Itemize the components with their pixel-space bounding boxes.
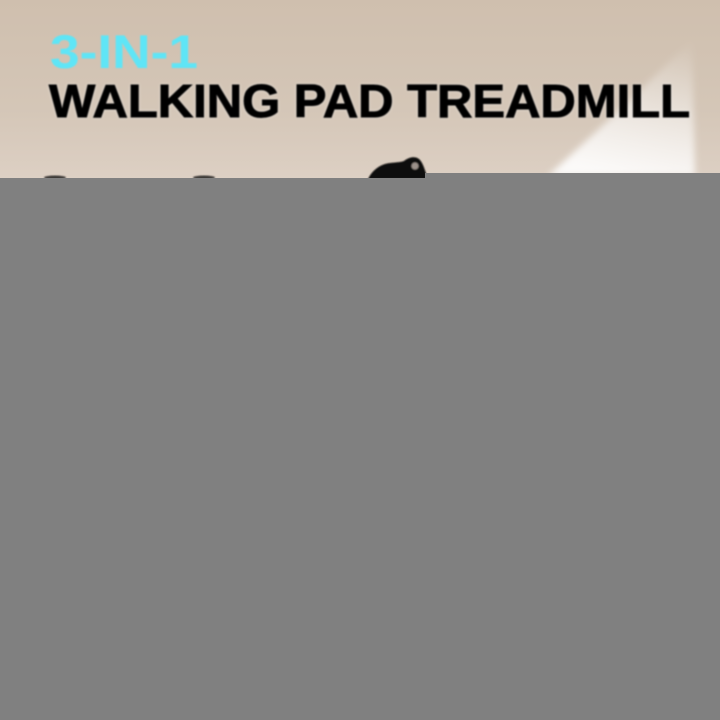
object: second foot peg [193, 176, 215, 180]
heading: 3-IN-1: 3-IN-1 [50, 25, 198, 78]
window light patch on wall [548, 40, 695, 176]
object: dark silhouette above panel [368, 157, 426, 179]
heading: walking pad treadmill: WALKING PAD TREADMILL [49, 75, 690, 127]
wall background [0, 0, 720, 180]
grey masked panel [0, 173, 720, 720]
object: left foot peg [44, 176, 66, 180]
heading: walking pad treadmill: WALKING PAD TREADMILL [49, 75, 690, 127]
